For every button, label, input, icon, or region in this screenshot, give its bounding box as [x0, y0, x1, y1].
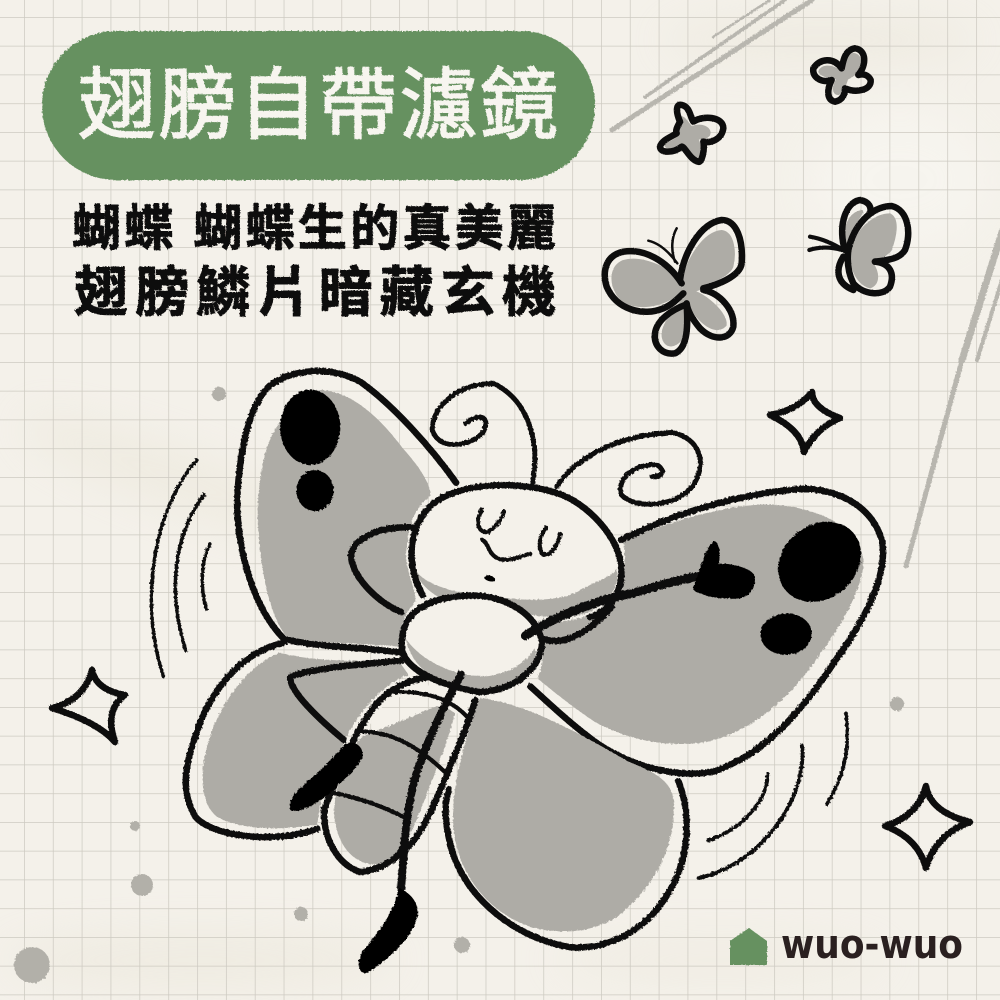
butterfly: side view	[809, 200, 908, 293]
butterfly: large open	[605, 220, 742, 354]
spot: upper right large	[763, 510, 876, 613]
sparkle: left	[52, 670, 125, 742]
gray ink splatters	[14, 387, 904, 983]
sparkles	[52, 392, 970, 868]
main butterfly	[151, 371, 883, 973]
wing: lower left	[186, 643, 408, 837]
wing: lower right	[446, 698, 687, 947]
gray speed streaks top right	[612, 0, 812, 130]
hand	[693, 541, 755, 599]
face	[478, 509, 560, 583]
spot: upper left large	[280, 390, 340, 465]
gray speed streaks right edge	[906, 232, 1000, 566]
left leg	[290, 661, 401, 811]
small butterflies	[605, 48, 908, 354]
title pill	[42, 31, 595, 180]
butterfly: small top right	[813, 48, 871, 102]
abdomen	[324, 674, 475, 872]
antennae	[432, 384, 700, 504]
motion lines right	[699, 713, 847, 878]
right leg	[359, 674, 461, 973]
subtitle	[72, 202, 556, 323]
motion lines left	[151, 460, 210, 676]
left foot	[290, 742, 363, 811]
title text: 翅膀自帶濾鏡	[78, 61, 558, 149]
wordmark: wuo-wuo	[781, 922, 963, 968]
icon: green house	[730, 928, 767, 965]
wing: upper right	[530, 489, 883, 774]
logo	[730, 922, 963, 968]
left arm	[351, 527, 412, 612]
spot: upper left small	[296, 470, 334, 511]
thorax	[402, 595, 542, 692]
wing: upper left	[237, 371, 456, 653]
right foot	[359, 888, 418, 973]
butterfly: small left	[660, 105, 723, 162]
sparkle: lower right	[885, 786, 970, 868]
subtitle line 1: 蝴蝶 蝴蝶生的真美麗	[72, 202, 556, 256]
spot: upper right small	[753, 608, 819, 661]
right arm	[525, 541, 755, 641]
head	[410, 485, 621, 617]
sparkle: upper right	[770, 392, 840, 452]
subtitle line 2: 翅膀鱗片暗藏玄機	[74, 263, 556, 323]
